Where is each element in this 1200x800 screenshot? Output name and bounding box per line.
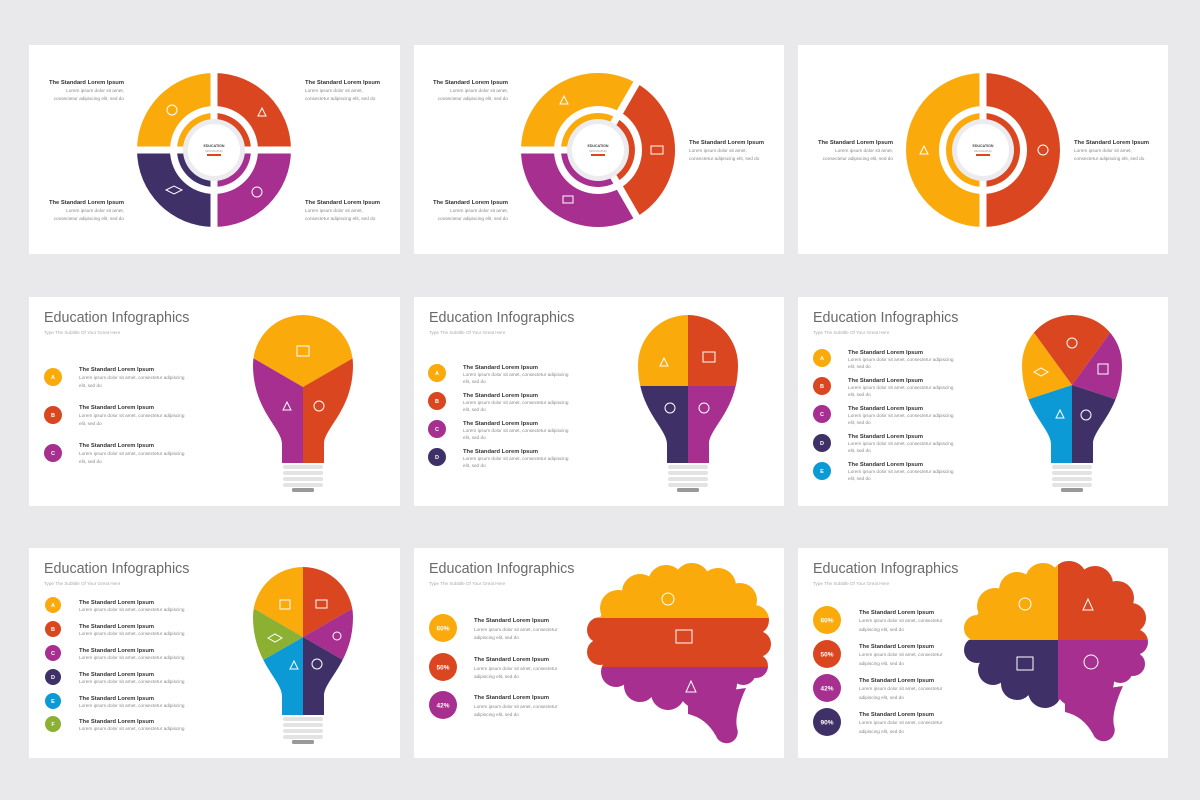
- percentage list: adipiscing elit, sed do: [474, 712, 519, 717]
- list A-C: Lorem ipsum dolor sit amet, consectetur adipiscing: [79, 375, 185, 380]
- percentage list: Lorem ipsum dolor sit amet, consectetur: [859, 618, 943, 623]
- heading: [44, 561, 189, 586]
- list A-D: Lorem ipsum dolor sit amet, consectetur adipiscing: [463, 372, 569, 377]
- percentage list: 42%: [820, 686, 834, 692]
- percentage list: The Standard Lorem Ipsum: [474, 695, 549, 701]
- list A-D: Lorem ipsum dolor sit amet, consectetur adipiscing: [463, 428, 569, 433]
- heading: Education Infographics: [429, 561, 574, 577]
- text blocks: consectetur adipiscing elit, sed do: [54, 96, 124, 101]
- percentage list: 60%: [820, 618, 834, 624]
- slide 1: four-part circle: [29, 45, 400, 254]
- list A-E: elit, sed do: [848, 364, 871, 369]
- text blocks: Lorem ipsum dolor sit amet,: [1074, 148, 1132, 153]
- text blocks: consectetur adipiscing elit, sed do: [438, 96, 508, 101]
- percentage list: Lorem ipsum dolor sit amet, consectetur: [474, 704, 558, 709]
- slide 2: three-part circle: [414, 45, 784, 254]
- percentage list: Lorem ipsum dolor sit amet, consectetur: [859, 720, 943, 725]
- text blocks: The Standard Lorem Ipsum: [49, 80, 124, 86]
- percentage list: adipiscing elit, sed do: [859, 729, 904, 734]
- slide 5: bulb 4 parts: [414, 297, 784, 506]
- list A-D: B: [435, 399, 439, 405]
- slide 3: two-part circle: [798, 45, 1168, 254]
- list A-C: elit, sed do: [79, 421, 102, 426]
- text blocks: Lorem ipsum dolor sit amet,: [450, 88, 508, 93]
- heading: Education Infographics: [44, 310, 189, 326]
- chart: three segment donut: [512, 73, 675, 227]
- text blocks: consectetur adipiscing elit, sed do: [438, 216, 508, 221]
- chart: quadrant donut: INFOGRAPHIC: [205, 149, 223, 153]
- list A-C: C: [51, 451, 55, 457]
- list A-E: Lorem ipsum dolor sit amet, consectetur adipiscing: [848, 441, 954, 446]
- list A-E: The Standard Lorem Ipsum: [848, 434, 923, 440]
- text blocks: Lorem ipsum dolor sit amet,: [66, 208, 124, 213]
- list A-E: Lorem ipsum dolor sit amet, consectetur adipiscing: [848, 413, 954, 418]
- text blocks: Lorem ipsum dolor sit amet,: [835, 148, 893, 153]
- heading: Type The Subtitle Of Your Great Here: [44, 581, 121, 586]
- list A-E: C: [820, 412, 824, 418]
- list A-D: D: [435, 455, 439, 461]
- list A-D: A: [435, 371, 439, 377]
- list A-E: elit, sed do: [848, 392, 871, 397]
- percentage list: Lorem ipsum dolor sit amet, consectetur: [859, 652, 943, 657]
- bulb chart: [638, 315, 738, 492]
- text blocks: The Standard Lorem Ipsum: [818, 140, 893, 146]
- percentage list: adipiscing elit, sed do: [474, 635, 519, 640]
- chart: three segment donut: INFOGRAPHIC: [589, 149, 607, 153]
- percentage list: 42%: [436, 702, 450, 710]
- text blocks: Lorem ipsum dolor sit amet,: [305, 88, 363, 93]
- list A-E: Lorem ipsum dolor sit amet, consectetur adipiscing: [848, 469, 954, 474]
- list A-F: The Standard Lorem Ipsum: [79, 600, 154, 606]
- percentage list: The Standard Lorem Ipsum: [474, 618, 549, 624]
- percentage list: The Standard Lorem Ipsum: [859, 610, 934, 616]
- bulb chart: [253, 315, 353, 492]
- list A-E: A: [820, 356, 824, 362]
- slide 4: bulb 3 parts: [29, 297, 400, 506]
- bulb chart: [253, 567, 353, 744]
- text blocks: [49, 80, 380, 221]
- list A-C: Lorem ipsum dolor sit amet, consectetur adipiscing: [79, 413, 185, 418]
- list A-D: C: [435, 427, 439, 433]
- text blocks: The Standard Lorem Ipsum: [305, 80, 380, 86]
- list A-E: elit, sed do: [848, 476, 871, 481]
- list A-D: The Standard Lorem Ipsum: [463, 365, 538, 371]
- text blocks: The Standard Lorem Ipsum: [305, 200, 380, 206]
- list A-E: elit, sed do: [848, 448, 871, 453]
- list A-F: Lorem ipsum dolor sit amet, consectetur adipiscing: [79, 726, 185, 731]
- text blocks: consectetur adipiscing elit, sed do: [689, 156, 760, 161]
- heading: Education Infographics: [44, 561, 189, 577]
- percentage list: adipiscing elit, sed do: [859, 627, 904, 632]
- list A-F: Lorem ipsum dolor sit amet, consectetur adipiscing: [79, 655, 185, 660]
- chart: quadrant donut: EDUCATION: [203, 144, 225, 148]
- list A-F: F: [51, 722, 55, 728]
- chart: half donuts: INFOGRAPHIC: [974, 149, 992, 153]
- heading: [44, 310, 189, 335]
- list A-E: Lorem ipsum dolor sit amet, consectetur adipiscing: [848, 357, 954, 362]
- text blocks: [433, 80, 764, 221]
- percentage list: [813, 606, 943, 736]
- text blocks: consectetur adipiscing elit, sed do: [823, 156, 893, 161]
- percentage list: The Standard Lorem Ipsum: [474, 657, 549, 663]
- list A-E: elit, sed do: [848, 420, 871, 425]
- list A-F: The Standard Lorem Ipsum: [79, 648, 154, 654]
- percentage list: 50%: [820, 652, 834, 658]
- text blocks: consectetur adipiscing elit, sed do: [305, 216, 376, 221]
- brain chart: [964, 561, 1148, 742]
- percentage list: Lorem ipsum dolor sit amet, consectetur: [474, 627, 558, 632]
- list A-F: Lorem ipsum dolor sit amet, consectetur adipiscing: [79, 607, 185, 612]
- slide 7: bulb 6 parts: [29, 548, 400, 758]
- list A-E: E: [820, 469, 824, 475]
- list A-C: [44, 367, 185, 464]
- heading: [429, 561, 574, 586]
- list A-D: The Standard Lorem Ipsum: [463, 393, 538, 399]
- percentage list: 90%: [820, 720, 834, 726]
- list A-E: D: [820, 441, 824, 447]
- list A-C: The Standard Lorem Ipsum: [79, 367, 154, 373]
- list A-D: Lorem ipsum dolor sit amet, consectetur adipiscing: [463, 400, 569, 405]
- list A-E: The Standard Lorem Ipsum: [848, 406, 923, 412]
- slide 8: brain 3 bands: [414, 548, 784, 758]
- percentage list: Lorem ipsum dolor sit amet, consectetur: [859, 686, 943, 691]
- list A-F: The Standard Lorem Ipsum: [79, 719, 154, 725]
- text blocks: The Standard Lorem Ipsum: [433, 200, 508, 206]
- list A-F: The Standard Lorem Ipsum: [79, 624, 154, 630]
- heading: Type The Subtitle Of Your Great Here: [44, 330, 121, 335]
- list A-D: Lorem ipsum dolor sit amet, consectetur adipiscing: [463, 456, 569, 461]
- list A-C: Lorem ipsum dolor sit amet, consectetur adipiscing: [79, 451, 185, 456]
- list A-C: B: [51, 413, 55, 419]
- list A-F: Lorem ipsum dolor sit amet, consectetur adipiscing: [79, 679, 185, 684]
- text blocks: consectetur adipiscing elit, sed do: [1074, 156, 1145, 161]
- list A-F: B: [51, 627, 55, 633]
- list A-D: The Standard Lorem Ipsum: [463, 449, 538, 455]
- text blocks: The Standard Lorem Ipsum: [49, 200, 124, 206]
- list A-D: elit, sed do: [463, 379, 486, 384]
- chart: quadrant donut: [130, 66, 298, 234]
- slide 6: bulb 5 parts: [798, 297, 1168, 506]
- list A-E: The Standard Lorem Ipsum: [848, 462, 923, 468]
- percentage list: [429, 614, 558, 719]
- list A-F: [45, 597, 185, 732]
- list A-E: The Standard Lorem Ipsum: [848, 350, 923, 356]
- text blocks: consectetur adipiscing elit, sed do: [54, 216, 124, 221]
- text blocks: Lorem ipsum dolor sit amet,: [450, 208, 508, 213]
- percentage list: adipiscing elit, sed do: [474, 674, 519, 679]
- text blocks: [818, 140, 1149, 161]
- text blocks: The Standard Lorem Ipsum: [1074, 140, 1149, 146]
- list A-F: The Standard Lorem Ipsum: [79, 672, 154, 678]
- list A-F: D: [51, 675, 55, 681]
- percentage list: The Standard Lorem Ipsum: [859, 644, 934, 650]
- text blocks: Lorem ipsum dolor sit amet,: [305, 208, 363, 213]
- heading: Type The Subtitle Of Your Great Here: [813, 330, 890, 335]
- bulb chart: [1022, 315, 1122, 492]
- percentage list: adipiscing elit, sed do: [859, 661, 904, 666]
- list A-E: The Standard Lorem Ipsum: [848, 378, 923, 384]
- list A-F: E: [51, 699, 55, 705]
- percentage list: 60%: [436, 626, 450, 632]
- slide 9: brain 4 quadrants: [798, 548, 1168, 760]
- list A-C: elit, sed do: [79, 459, 102, 464]
- percentage list: Lorem ipsum dolor sit amet, consectetur: [474, 666, 558, 671]
- heading: [813, 310, 958, 335]
- list A-C: The Standard Lorem Ipsum: [79, 405, 154, 411]
- text blocks: The Standard Lorem Ipsum: [433, 80, 508, 86]
- heading: Type The Subtitle Of Your Great Here: [813, 581, 890, 586]
- heading: Type The Subtitle Of Your Great Here: [429, 581, 506, 586]
- chart: half donuts: [906, 66, 1060, 234]
- heading: Education Infographics: [813, 561, 958, 577]
- text blocks: Lorem ipsum dolor sit amet,: [66, 88, 124, 93]
- list A-D: [428, 364, 569, 468]
- list A-D: The Standard Lorem Ipsum: [463, 421, 538, 427]
- list A-F: Lorem ipsum dolor sit amet, consectetur adipiscing: [79, 703, 185, 708]
- chart: half donuts: EDUCATION: [972, 144, 994, 148]
- heading: Education Infographics: [429, 310, 574, 326]
- list A-F: The Standard Lorem Ipsum: [79, 696, 154, 702]
- list A-C: A: [51, 375, 55, 381]
- list A-D: elit, sed do: [463, 407, 486, 412]
- heading: [429, 310, 574, 335]
- percentage list: adipiscing elit, sed do: [859, 695, 904, 700]
- list A-D: elit, sed do: [463, 463, 486, 468]
- list A-E: B: [820, 384, 824, 390]
- list A-E: Lorem ipsum dolor sit amet, consectetur adipiscing: [848, 385, 954, 390]
- brain chart: [587, 563, 771, 744]
- text blocks: Lorem ipsum dolor sit amet,: [689, 148, 747, 153]
- text blocks: The Standard Lorem Ipsum: [689, 140, 764, 146]
- heading: Type The Subtitle Of Your Great Here: [429, 330, 506, 335]
- text blocks: consectetur adipiscing elit, sed do: [305, 96, 376, 101]
- percentage list: The Standard Lorem Ipsum: [859, 678, 934, 684]
- list A-C: elit, sed do: [79, 383, 102, 388]
- list A-D: elit, sed do: [463, 435, 486, 440]
- percentage list: The Standard Lorem Ipsum: [859, 712, 934, 718]
- list A-F: C: [51, 651, 55, 657]
- list A-F: A: [51, 603, 55, 609]
- chart: three segment donut: EDUCATION: [587, 144, 609, 148]
- heading: [813, 561, 958, 586]
- percentage list: 50%: [436, 664, 450, 672]
- list A-F: Lorem ipsum dolor sit amet, consectetur adipiscing: [79, 631, 185, 636]
- list A-E: [813, 349, 954, 481]
- list A-C: The Standard Lorem Ipsum: [79, 443, 154, 449]
- heading: Education Infographics: [813, 310, 958, 326]
